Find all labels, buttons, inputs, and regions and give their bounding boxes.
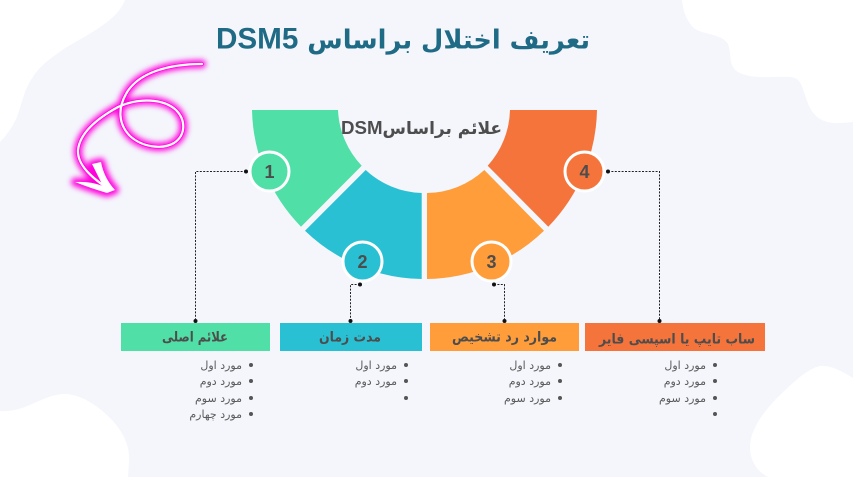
list: subtype: مورد دوم xyxy=(664,375,706,388)
segment 2 xyxy=(305,170,422,279)
list: subtype: مورد اول xyxy=(664,359,706,372)
segment 3 xyxy=(427,170,544,279)
list: subtype: مورد سوم xyxy=(659,392,706,405)
header: main symptoms: علائم اصلی xyxy=(162,330,228,346)
list: exclusion: مورد اول xyxy=(509,359,551,372)
list: duration: مورد دوم xyxy=(355,375,397,388)
list: duration xyxy=(355,359,408,400)
header: main symptoms xyxy=(121,323,270,351)
list: exclusion: مورد سوم xyxy=(504,392,551,405)
list: subtype xyxy=(659,359,717,416)
segment 4 xyxy=(488,110,597,227)
badge 3 xyxy=(472,242,511,281)
header: exclusion: موارد رد تشخیص xyxy=(452,330,557,346)
list: main symptoms: مورد دوم xyxy=(200,375,242,388)
list: exclusion xyxy=(504,359,562,405)
badge 3: 3 xyxy=(486,252,497,272)
badge 2: 2 xyxy=(357,252,368,272)
list: exclusion: مورد دوم xyxy=(509,375,551,388)
list: main symptoms: مورد اول xyxy=(200,359,242,372)
header: duration: مدت زمان xyxy=(319,330,381,346)
list: main symptoms: مورد چهارم xyxy=(189,408,242,421)
badge 2 xyxy=(343,242,382,281)
header: subtype: ساب تایپ یا اسپسی فایر xyxy=(598,332,755,348)
connector lines xyxy=(196,172,660,321)
title: تعریف اختلال براساس DSM5 xyxy=(216,22,590,56)
badge 4 xyxy=(565,152,604,191)
header: exclusion xyxy=(430,323,579,351)
list: duration: مورد اول xyxy=(355,359,397,372)
segment 1 xyxy=(252,110,362,227)
badge 4: 4 xyxy=(579,162,590,182)
chart heading: علائم براساسDSM xyxy=(341,117,502,139)
badge 1 xyxy=(250,152,289,191)
connector dots xyxy=(194,170,662,323)
header: duration xyxy=(280,323,422,351)
list: main symptoms: مورد سوم xyxy=(195,392,242,405)
list: main symptoms xyxy=(189,359,253,421)
header: subtype xyxy=(585,323,765,351)
badge 1: 1 xyxy=(264,162,275,182)
